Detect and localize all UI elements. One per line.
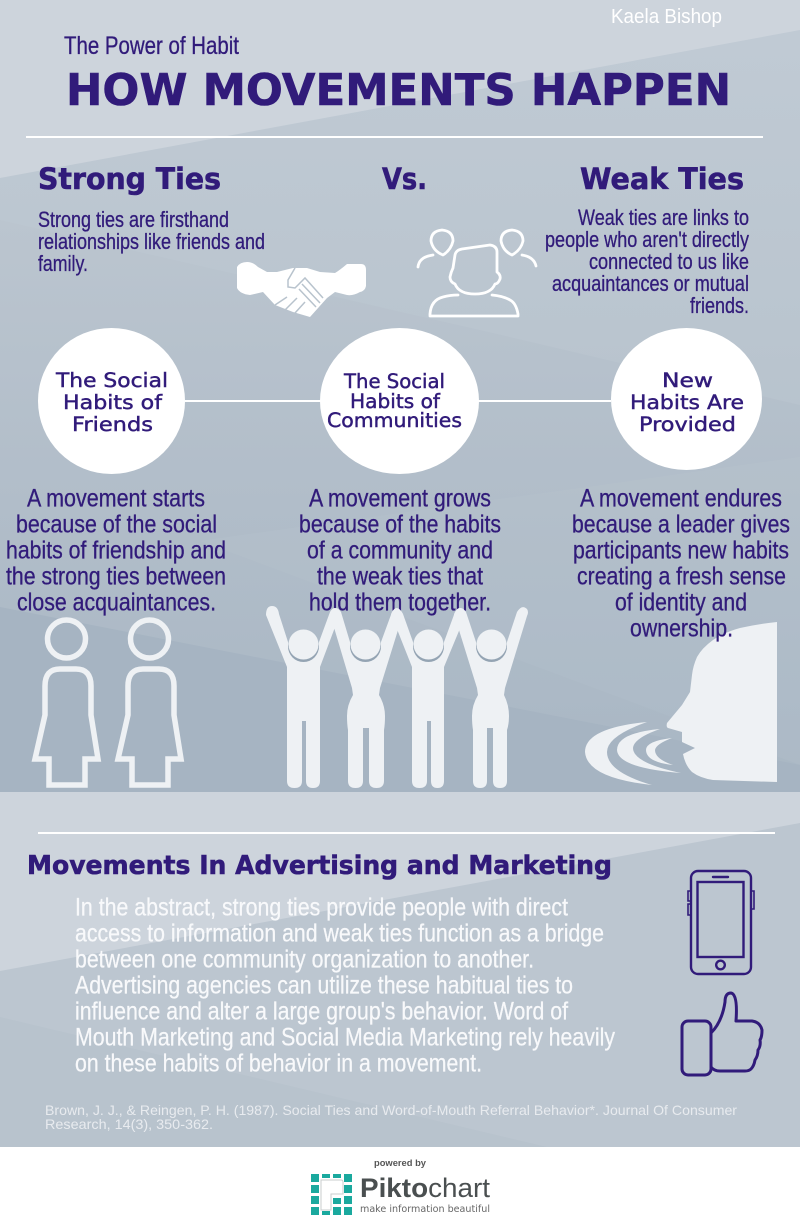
text: friends movement: habits of friendship and [6, 536, 226, 564]
author credit: Kaela Bishop [611, 6, 722, 28]
circle: social habits of friends: Habits of [63, 391, 163, 414]
text: leader movement: ownership. [630, 614, 733, 642]
icon: thumbs up [682, 993, 762, 1075]
text: advertising paragraph: In the abstract, strong ties provide people with direct [75, 894, 568, 922]
circle: social habits of friends: Friends [72, 413, 153, 436]
text: community movement: because of the habits [299, 510, 501, 538]
icon: speaking head with sound waves [585, 622, 777, 785]
text: advertising paragraph: influence and alter a large group's behavior. Word of [75, 998, 568, 1026]
text: advertising paragraph: on these habits of behavior in a movement. [75, 1050, 482, 1078]
circle: social habits of friends: The Social [55, 369, 168, 392]
text: community movement: hold them together. [309, 588, 491, 616]
connector line [185, 400, 611, 402]
icon: smartphone [688, 871, 754, 974]
text: advertising paragraph: between one community organization to another. [75, 946, 534, 974]
text: weak ties definition: friends. [690, 293, 749, 318]
logo mark [311, 1174, 352, 1215]
circle: social habits of friends [38, 328, 185, 474]
text: advertising paragraph: Mouth Marketing and Social Media Marketing rely heavily [75, 1024, 615, 1052]
circle: social habits of communities: Habits of [350, 390, 441, 413]
text: leader movement: of identity and [615, 588, 747, 616]
icon: handshake [237, 262, 366, 317]
footer: piktochart branding [311, 1158, 491, 1215]
text: friends movement: A movement starts [27, 484, 205, 512]
text: community movement [299, 484, 501, 616]
circle: social habits of communities: The Social [343, 370, 445, 393]
text: friends movement: the strong ties between [6, 562, 226, 590]
text: friends movement: close acquaintances. [17, 588, 216, 616]
circle: new habits are provided: Habits Are [630, 391, 744, 414]
text: weak ties definition: connected to us like [589, 249, 749, 274]
text: advertising paragraph [75, 894, 615, 1078]
text: friends movement [6, 484, 226, 616]
subtitle: The Power of Habit [64, 32, 239, 60]
text: community movement: A movement grows [309, 484, 491, 512]
text: leader movement [572, 484, 790, 642]
circle: new habits are provided [611, 328, 762, 470]
heading: advertising and marketing: Movements In Advertising and Marketing [27, 851, 612, 881]
circle: new habits are provided: Provided [639, 413, 736, 436]
text: strong ties definition: relationships like friends and [38, 229, 265, 254]
text: weak ties definition [545, 205, 749, 318]
heading: strong ties: Strong Ties [38, 162, 221, 196]
text: friends movement: because of the social [16, 510, 217, 538]
text: weak ties definition: people who aren't directly [545, 227, 749, 252]
footer: piktochart branding: Piktochart [360, 1173, 491, 1203]
citation: Brown, J. J., & Reingen, P. H. (1987). Social Ties and Word-of-Mouth Referral Behavior*. Journal Of Consumer [45, 1102, 737, 1118]
text: community movement: of a community and [307, 536, 493, 564]
text: community movement: the weak ties that [317, 562, 483, 590]
heading: weak ties: Weak Ties [580, 162, 744, 196]
text: strong ties definition [38, 207, 265, 276]
circle: social habits of communities [320, 328, 479, 474]
title: HOW MOVEMENTS HAPPEN [66, 65, 731, 116]
text: weak ties definition: acquaintances or mutual [552, 271, 749, 296]
heading: versus: Vs. [382, 162, 427, 196]
icon: group of four people with raised arms [266, 606, 528, 788]
text: strong ties definition: family. [38, 251, 88, 276]
icon: two women outlines [35, 620, 181, 785]
circle: new habits are provided: New [662, 369, 713, 392]
circle: social habits of communities: Communities [327, 409, 462, 432]
text: weak ties definition: Weak ties are links to [578, 205, 749, 230]
text: strong ties definition: Strong ties are firsthand [38, 207, 229, 232]
icon: connected people [418, 230, 536, 316]
footer: piktochart branding: powered by [374, 1158, 427, 1169]
text: advertising paragraph: Advertising agencies can utilize these habitual ties to [75, 972, 573, 1000]
citation: Research, 14(3), 350-362. [45, 1116, 213, 1132]
footer: piktochart branding: make information beautiful [360, 1204, 490, 1215]
citation [45, 1102, 737, 1132]
text: advertising paragraph: access to information and weak ties function as a bridge [75, 920, 604, 948]
